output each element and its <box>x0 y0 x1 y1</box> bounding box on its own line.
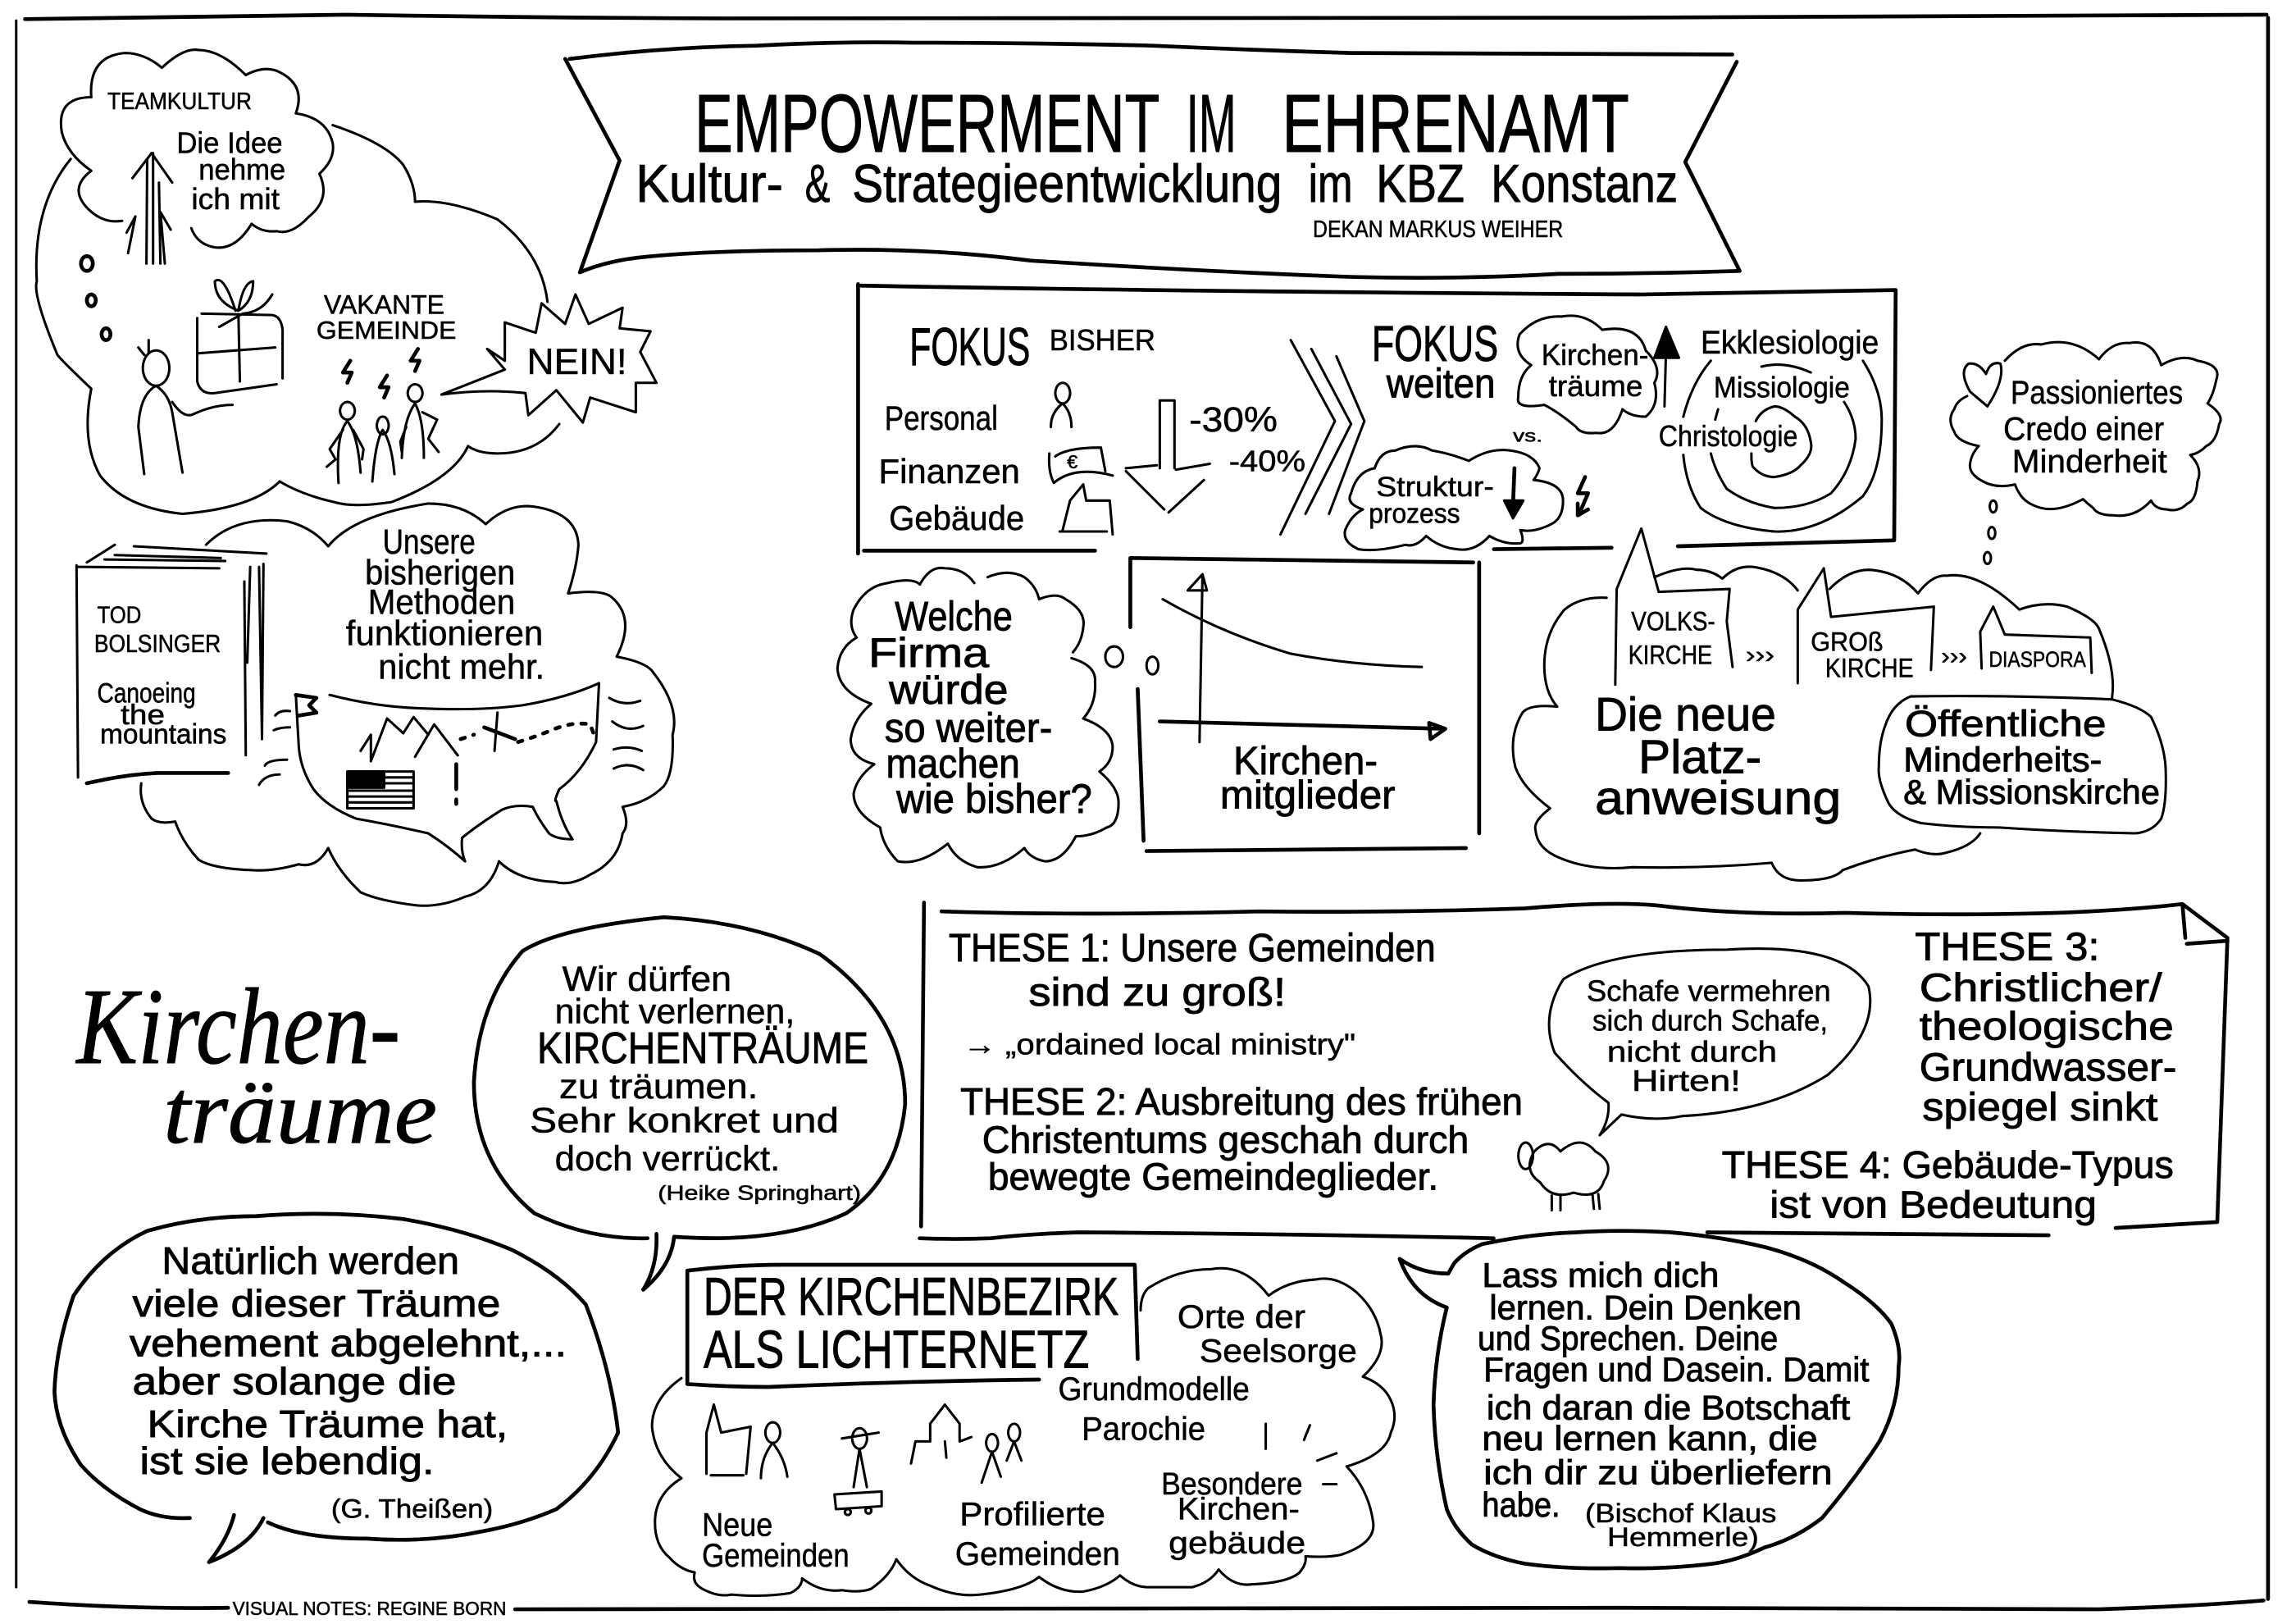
text: passionate creed of a minority: Passioniertes <box>2011 376 2183 411</box>
banner outline <box>565 43 1740 278</box>
icon: big church <box>1615 528 1733 685</box>
thesis 3: theologische <box>1920 1004 2174 1048</box>
text: methods no longer work <box>346 522 544 687</box>
numbers: percent cuts <box>1189 400 1305 477</box>
main title: IM <box>1187 78 1237 170</box>
icon: book: BOLSINGER <box>94 630 221 658</box>
subtitle: Konstanz <box>1491 154 1678 213</box>
x axis <box>1159 722 1446 739</box>
label: profiled parishes: Gemeinden <box>955 1536 1120 1572</box>
icon: lightning bolts <box>343 349 420 398</box>
heading: widen focus: FOKUS <box>1372 316 1498 372</box>
heading: widen focus: weiten <box>1386 361 1496 407</box>
small cloud: Teamkultur: Die Idee <box>176 127 283 160</box>
speech bubble: Theissen quote: vehement abgelehnt,... <box>130 1321 567 1364</box>
thesis 1: → „ordained local ministry" <box>963 1028 1355 1061</box>
thought cloud: company question: würde <box>888 667 1008 713</box>
speech bubble: Theissen quote: (G. Theißen) <box>331 1494 493 1524</box>
speech bubble: Springhart quote: zu träumen. <box>559 1067 758 1106</box>
speech bubble: Springhart quote: Wir dürfen <box>563 960 731 999</box>
subtitle: Strategieentwicklung <box>852 154 1282 213</box>
label: vacant parish: VAKANTE <box>324 290 444 319</box>
label: places of pastoral care <box>1178 1299 1357 1369</box>
label: special church buildings: Kirchen- <box>1178 1492 1300 1526</box>
icon: lightning <box>1578 477 1588 515</box>
cloud: structure process <box>1345 446 1563 550</box>
icon: medium church <box>1797 568 1934 683</box>
speech bubble: sheep: nicht durch <box>1607 1035 1777 1068</box>
small cloud: Teamkultur <box>61 50 333 248</box>
axis label: Kirchen- <box>1233 739 1378 783</box>
panel: Teamkultur and vacant parish cloud <box>36 50 559 513</box>
icon: banknote <box>1049 448 1113 483</box>
arrow: decline <box>1126 400 1210 513</box>
subtitle: KBZ <box>1376 154 1465 213</box>
speech bubble: Hemmerle quote: ich daran die Botschaft <box>1487 1389 1851 1426</box>
text: passionate creed of a minority: Credo einer <box>2003 412 2164 448</box>
diagram: concentric theology circles: Missiologie <box>1714 371 1850 404</box>
icon: light rays <box>1266 1424 1337 1484</box>
speech bubble: Theissen quote: viele dieser Träume <box>133 1282 500 1325</box>
icon: book: the <box>121 700 165 731</box>
list: personnel finances buildings: Finanzen <box>879 453 1020 490</box>
heading: focus so far: BISHER <box>1050 324 1155 357</box>
frame <box>858 284 1896 554</box>
thesis 2: THESE 2: Ausbreitung des frühen <box>960 1080 1523 1123</box>
text: methods no longer work: Methoden <box>368 583 515 623</box>
map: USA with canoe and mountains <box>259 683 643 861</box>
speech bubble: sheep: Schafe vermehren <box>1587 974 1831 1008</box>
cloud: structure process: Struktur- <box>1376 472 1494 503</box>
speech bubble: Hemmerle quote: neu lernen kann, die <box>1482 1420 1818 1457</box>
subtitle: & <box>805 154 830 213</box>
label: new parishes: Gemeinden <box>702 1538 850 1574</box>
speech bubble: Springhart quote: Sehr konkret und <box>530 1101 839 1140</box>
label: profiled parishes <box>955 1497 1120 1572</box>
icon: sheep <box>1519 1143 1608 1211</box>
speech bubble: Theissen quote <box>54 1214 618 1562</box>
icon: three people <box>326 385 439 483</box>
text: passionate creed of a minority <box>2003 376 2183 480</box>
cloud: passionate creed <box>1951 342 2221 564</box>
label: special church buildings: Besondere <box>1161 1467 1302 1501</box>
icon: small church <box>1980 607 2092 673</box>
heading: church dreams: Kirchen- <box>75 966 400 1087</box>
cloud outline <box>652 1268 1395 1596</box>
label: basic models: Parochie <box>1082 1412 1205 1448</box>
label: places of pastoral care: Orte der <box>1178 1299 1305 1335</box>
cloud outline <box>141 504 674 906</box>
text: passionate creed of a minority: Minderheit <box>2012 445 2167 480</box>
speech burst: Nein <box>441 294 657 422</box>
cloud: church dreams <box>1518 316 1657 433</box>
icon: big church: KIRCHE <box>1629 640 1712 670</box>
label: places of pastoral care: Seelsorge <box>1200 1333 1357 1369</box>
icon: big church: VOLKS- <box>1631 606 1715 636</box>
thought cloud: company question: wie bisher? <box>895 776 1092 822</box>
cloud: church dreams: Kirchen- <box>1542 339 1648 372</box>
heading: widen focus <box>1372 316 1498 407</box>
icon: person <box>1051 383 1072 427</box>
icon: book: Canoeing <box>97 677 196 709</box>
big cloud outline <box>36 125 559 513</box>
arrow: down <box>1504 468 1524 518</box>
speech bubble: Hemmerle quote: habe. <box>1482 1486 1560 1524</box>
speech bubble: Springhart quote: nicht verlernen, <box>555 992 795 1032</box>
thought cloud: company question: Welche <box>895 593 1013 639</box>
icon: book: mountains <box>100 719 226 750</box>
icon: building <box>1059 485 1113 535</box>
rounded box: public minority and mission church: Minderheits- <box>1903 741 2102 779</box>
speech bubble: Theissen quote: aber solange die <box>133 1360 456 1403</box>
speech bubble: Springhart quote <box>474 917 905 1290</box>
cloud outline <box>1513 567 2113 880</box>
icon: person with gift <box>139 340 233 474</box>
text: methods no longer work: nicht mehr. <box>378 648 544 687</box>
chart: church members declining <box>1130 558 1479 851</box>
main title: EHRENAMT <box>1282 78 1629 170</box>
speech bubble: Hemmerle quote: Lass mich dich <box>1482 1257 1719 1294</box>
cloud: structure process: prozess <box>1369 498 1460 529</box>
arrow: up <box>1654 327 1679 406</box>
text: methods no longer work: Unsere <box>383 522 476 562</box>
icon: small church and two people <box>911 1405 1022 1483</box>
subtitle: Kultur- <box>636 154 783 213</box>
author: DEKAN MARKUS WEIHER <box>1313 217 1563 243</box>
rounded box: public minority and mission church: & Missionskirche <box>1903 773 2160 811</box>
speech bubble: Hemmerle quote: Hemmerle) <box>1607 1522 1759 1552</box>
small cloud: Teamkultur: ich mit <box>191 183 280 216</box>
thought cloud: company question: Firma <box>868 630 989 676</box>
subtitle: im <box>1309 154 1352 213</box>
thesis 2: Christentums geschah durch <box>982 1118 1469 1161</box>
rounded box: public minority and mission church <box>1879 696 2166 833</box>
label: basic models <box>1059 1371 1250 1448</box>
chevrons <box>1281 340 1364 535</box>
numbers: percent cuts: -40% <box>1229 445 1305 477</box>
icon: up arrows <box>126 153 172 263</box>
panel: new place, church types cloud <box>1513 528 2166 880</box>
main title: EMPOWERMENT <box>695 78 1159 170</box>
diagram: concentric theology circles: Christologie <box>1659 420 1797 453</box>
label: basic models: Grundmodelle <box>1059 1371 1250 1407</box>
icon: banknote: € <box>1067 451 1077 472</box>
heading: church dreams <box>75 966 437 1163</box>
numbers: percent cuts: -30% <box>1189 400 1278 440</box>
speech bubble: Springhart quote: (Heike Springhart) <box>658 1182 861 1205</box>
thesis 1 <box>949 926 1436 1061</box>
thesis 1: sind zu groß! <box>1028 970 1286 1015</box>
list: personnel finances buildings: Gebäude <box>889 500 1024 537</box>
sheet outline with folded corner <box>920 902 2227 1239</box>
icon: church and person <box>707 1405 787 1478</box>
speech bubble: Hemmerle quote: (Bischof Klaus <box>1585 1499 1776 1528</box>
text: methods no longer work: funktionieren <box>346 614 543 653</box>
thesis 1: THESE 1: Unsere Gemeinden <box>949 926 1436 970</box>
speech bubble: Hemmerle quote: ich dir zu überliefern <box>1483 1453 1833 1491</box>
label: versus: vs. <box>1513 427 1542 446</box>
rounded box: public minority and mission church: Öffentliche <box>1905 704 2107 745</box>
icon: person on wagon <box>835 1428 882 1515</box>
thought cloud: company question: so weiter- <box>885 705 1052 751</box>
speech bubble: Theissen quote: ist sie lebendig. <box>140 1439 434 1482</box>
speech bubble: Theissen quote: Natürlich werden <box>162 1239 459 1282</box>
y axis <box>1187 574 1207 742</box>
axis label <box>1220 739 1396 818</box>
text: methods no longer work: bisherigen <box>365 554 515 593</box>
heading: church dreams: träume <box>163 1062 437 1163</box>
text: new placement <box>1595 688 1841 825</box>
heading box: ALS LICHTERNETZ <box>704 1321 1089 1380</box>
thesis 3: Grundwasser- <box>1920 1045 2176 1090</box>
speech bubble: Hemmerle quote: und Sprechen. Deine <box>1478 1320 1778 1357</box>
panel: focus comparison <box>858 284 1896 554</box>
thesis 3 <box>1915 924 2176 1129</box>
panel: book and methods cloud <box>76 504 674 906</box>
arrows: ››› <box>1941 643 1967 670</box>
thesis 4: THESE 4: Gebäude-Typus <box>1722 1143 2174 1186</box>
arrows: ››› <box>1746 642 1774 668</box>
speech burst: Nein: NEIN! <box>527 340 627 382</box>
panel: theses <box>920 902 2227 1239</box>
thesis 2 <box>960 1080 1523 1198</box>
label: profiled parishes: Profilierte <box>959 1497 1105 1533</box>
small cloud: Teamkultur: nehme <box>198 153 285 186</box>
label: new parishes: Neue <box>702 1507 772 1543</box>
icon: gift <box>198 280 283 393</box>
title banner <box>565 43 1740 278</box>
speech bubble: Theissen quote: Kirche Träume hat, <box>147 1403 508 1445</box>
speech bubble: Hemmerle quote <box>1400 1231 1899 1568</box>
subtitle <box>636 154 1678 213</box>
thesis 3: THESE 3: <box>1915 924 2099 969</box>
list: personnel finances buildings: Personal <box>885 399 998 437</box>
thesis 3: spiegel sinkt <box>1922 1085 2158 1129</box>
icon: medium church: GROß <box>1811 627 1884 656</box>
thesis 2: bewegte Gemeindeglieder. <box>988 1155 1438 1198</box>
axis label: mitglieder <box>1220 773 1396 818</box>
thesis 4 <box>1722 1143 2174 1226</box>
label: new parishes <box>702 1507 850 1574</box>
text: new placement: Platz- <box>1638 731 1761 784</box>
speech bubble: sheep: Hirten! <box>1632 1065 1741 1097</box>
thought cloud: company question <box>837 568 1159 867</box>
thesis 3: Christlicher/ <box>1920 965 2162 1010</box>
credit: VISUAL NOTES: REGINE BORN <box>233 1598 506 1619</box>
small cloud: Teamkultur: TEAMKULTUR <box>107 89 252 115</box>
heading box <box>687 1265 1137 1387</box>
speech bubble: sheep <box>1549 949 1870 1135</box>
label: special church buildings: gebäude <box>1168 1526 1305 1560</box>
thesis 4: ist von Bedeutung <box>1770 1183 2097 1226</box>
list: personnel finances buildings <box>879 399 1024 537</box>
declining curve <box>1163 600 1422 667</box>
diagram: concentric theology circles <box>1659 326 1882 531</box>
text: new placement: Die neue <box>1595 688 1776 741</box>
speech bubble: Hemmerle quote: lernen. Dein Denken <box>1489 1289 1802 1326</box>
label: vacant parish <box>317 290 456 344</box>
text: new placement: anweisung <box>1595 772 1841 825</box>
speech bubble: Springhart quote: KIRCHENTRÄUME <box>537 1024 868 1073</box>
heading box: DER KIRCHENBEZIRK <box>704 1267 1118 1326</box>
icon: small church: DIASPORA <box>1988 647 2086 672</box>
chart frame <box>1130 558 1479 851</box>
label: vacant parish: GEMEINDE <box>317 317 456 344</box>
speech bubble: Springhart quote: doch verrückt. <box>555 1139 780 1179</box>
icon: heart <box>1964 363 2002 406</box>
label: special church buildings <box>1161 1467 1305 1560</box>
diagram: concentric theology circles: Ekklesiologie <box>1701 326 1879 361</box>
speech bubble: Hemmerle quote: Fragen und Dasein. Damit <box>1483 1351 1870 1389</box>
icon: medium church: KIRCHE <box>1825 654 1914 683</box>
panel: church district as string of lights <box>652 1265 1395 1596</box>
heading: focus so far: FOKUS <box>909 317 1030 376</box>
speech bubble: sheep: sich durch Schafe, <box>1592 1004 1828 1038</box>
cloud: church dreams: träume <box>1549 370 1642 403</box>
icon: book: TOD <box>97 602 141 628</box>
thought dots <box>1984 500 1997 564</box>
icon: book <box>76 545 266 783</box>
thought cloud: company question: machen <box>886 741 1020 787</box>
thought dots <box>81 256 111 340</box>
